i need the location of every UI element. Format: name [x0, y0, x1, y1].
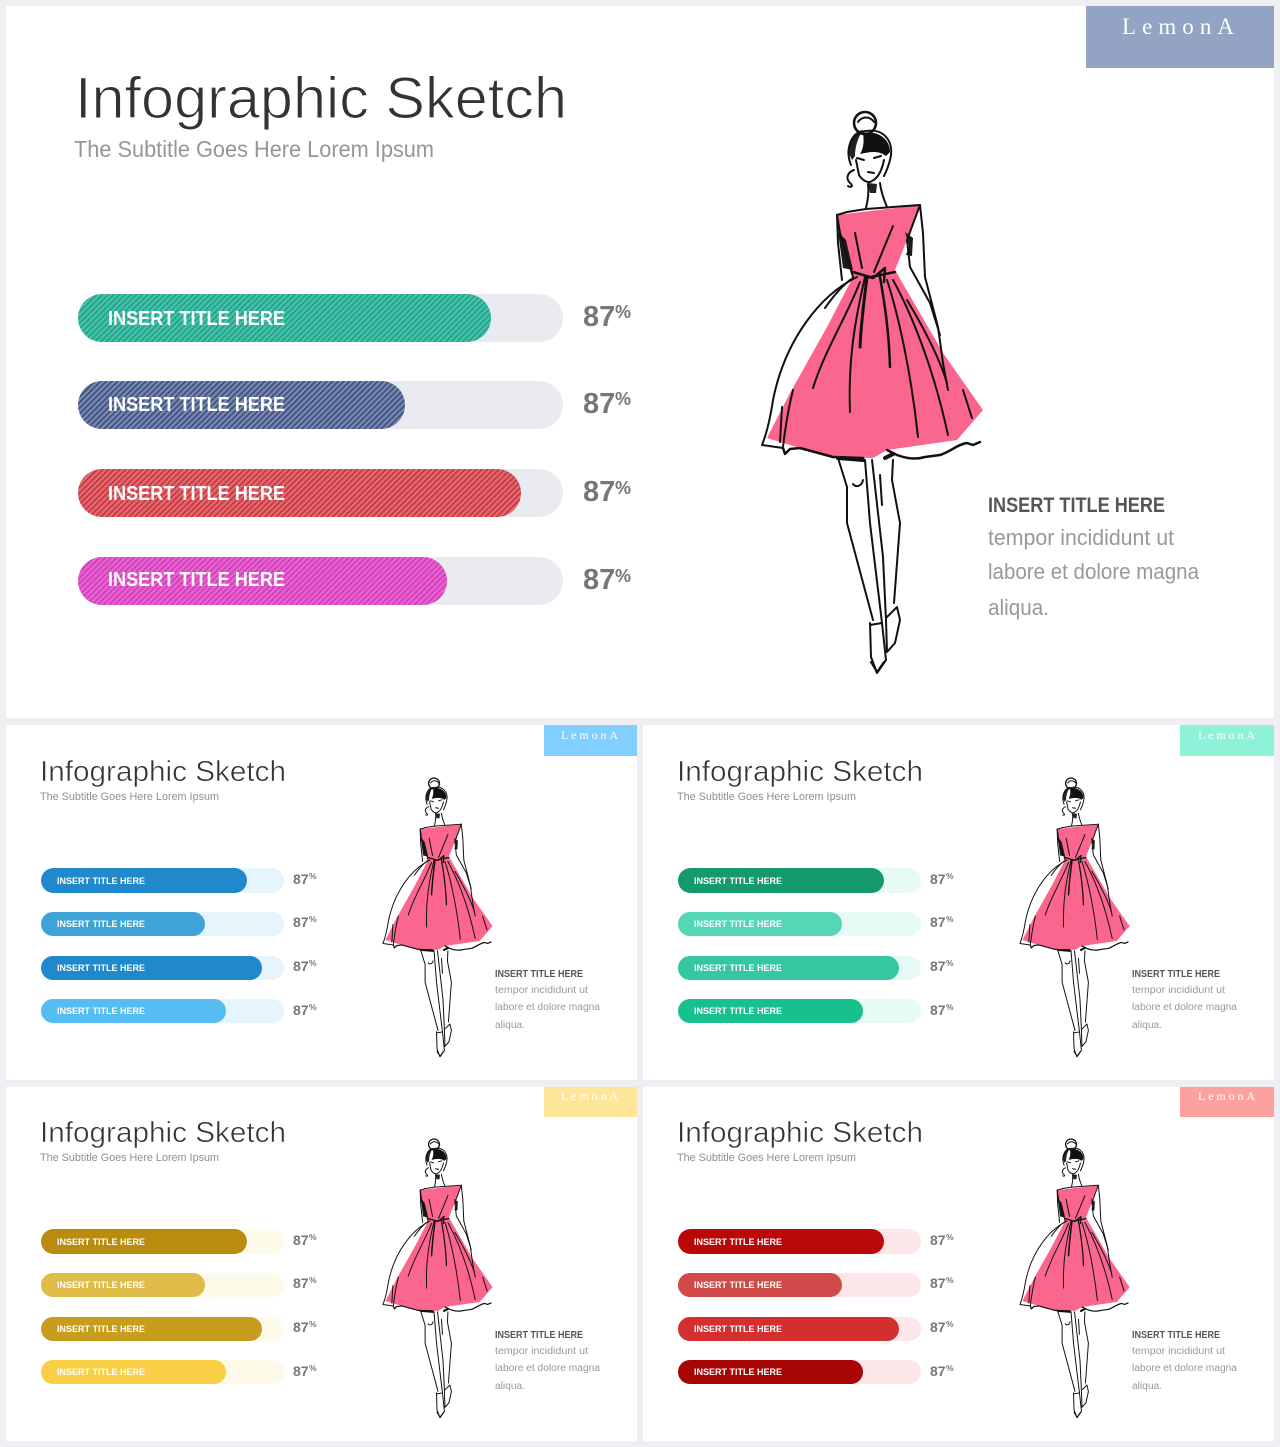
- bar: row 3: 87: [583, 476, 615, 508]
- text block: labore et dolore magna: [495, 1002, 600, 1013]
- text block: [1132, 969, 1237, 1031]
- logo tab: LemonA: [1198, 728, 1255, 742]
- bars: INSERT TITLE HERE: [57, 1324, 145, 1335]
- subtitle: The Subtitle Goes Here Lorem Ipsum: [40, 1152, 219, 1164]
- subtitle: The Subtitle Goes Here Lorem Ipsum: [74, 136, 434, 162]
- text block: INSERT TITLE HERE: [1132, 969, 1220, 980]
- panel: green variant: [643, 725, 1274, 1080]
- bars: 87: [930, 958, 946, 974]
- bar: row 2: [78, 381, 631, 429]
- text block: description: aliqua.: [988, 595, 1049, 620]
- bars: %: [946, 958, 954, 968]
- logo tab: [544, 1087, 637, 1117]
- bars: INSERT TITLE HERE: [694, 1280, 782, 1291]
- bars: INSERT TITLE HERE: [694, 1237, 782, 1248]
- bars: INSERT TITLE HERE: [694, 1367, 782, 1378]
- bars: %: [946, 1275, 954, 1285]
- text block: labore et dolore magna: [495, 1363, 600, 1374]
- text block: tempor incididunt ut: [495, 985, 588, 996]
- logo tab: [544, 725, 637, 756]
- text block: aliqua.: [495, 1020, 525, 1031]
- title: Infographic Sketch: [40, 756, 286, 788]
- bars: 87: [930, 914, 946, 930]
- bar: row 2: INSERT TITLE HERE: [108, 394, 285, 416]
- bars: INSERT TITLE HERE: [57, 919, 145, 930]
- illustration: [1020, 778, 1130, 1057]
- bars: %: [946, 1232, 954, 1242]
- panel: blue variant: [6, 725, 637, 1080]
- illustration: [383, 778, 493, 1057]
- bar: row 2: %: [615, 389, 631, 409]
- logo tab: LemonA: [561, 1089, 618, 1103]
- text block: aliqua.: [1132, 1020, 1162, 1031]
- subtitle: The Subtitle Goes Here Lorem Ipsum: [677, 791, 856, 803]
- bars: [41, 868, 317, 1023]
- bars: INSERT TITLE HERE: [57, 963, 145, 974]
- bars: 87: [930, 871, 946, 887]
- subtitle: The Subtitle Goes Here Lorem Ipsum: [40, 791, 219, 803]
- bars: INSERT TITLE HERE: [57, 876, 145, 887]
- title: Infographic Sketch: [75, 66, 567, 131]
- bars: %: [946, 1363, 954, 1373]
- bars: [41, 1229, 317, 1384]
- text block: tempor incididunt ut: [1132, 985, 1225, 996]
- text block: INSERT TITLE HERE: [1132, 1330, 1220, 1341]
- bars: 87: [293, 1232, 309, 1248]
- bars: %: [309, 1363, 317, 1373]
- text block: description: tempor incididunt ut: [988, 525, 1174, 550]
- bar: row 3: %: [615, 478, 631, 498]
- logo tab: [1086, 6, 1274, 68]
- bars: INSERT TITLE HERE: [57, 1237, 145, 1248]
- text block: [495, 969, 600, 1031]
- bar: row 1: [78, 294, 631, 342]
- bars: INSERT TITLE HERE: [694, 963, 782, 974]
- bar: row 1: INSERT TITLE HERE: [108, 308, 285, 330]
- bar: row 4: INSERT TITLE HERE: [108, 569, 285, 591]
- bars: %: [946, 914, 954, 924]
- bars: 87: [930, 1363, 946, 1379]
- bar: row 3: [78, 469, 631, 517]
- bars: INSERT TITLE HERE: [694, 919, 782, 930]
- bars: 87: [293, 958, 309, 974]
- bars: INSERT TITLE HERE: [57, 1280, 145, 1291]
- text block: tempor incididunt ut: [495, 1346, 588, 1357]
- text block: INSERT TITLE HERE: [495, 969, 583, 980]
- text block: tempor incididunt ut: [1132, 1346, 1225, 1357]
- text block: INSERT TITLE HERE: [495, 1330, 583, 1341]
- text block: aliqua.: [495, 1381, 525, 1392]
- bar: row 2: 87: [583, 388, 615, 420]
- bars: %: [946, 1319, 954, 1329]
- text block: labore et dolore magna: [1132, 1363, 1237, 1374]
- bar: row 4: 87: [583, 564, 615, 596]
- bar: row 1: 87: [583, 301, 615, 333]
- bar: row 3: INSERT TITLE HERE: [108, 483, 285, 505]
- bars: INSERT TITLE HERE: [57, 1006, 145, 1017]
- bars: INSERT TITLE HERE: [694, 1324, 782, 1335]
- illustration: woman in pink dress: [762, 112, 983, 673]
- title: Infographic Sketch: [677, 756, 923, 788]
- logo tab: LemonA: [1198, 1089, 1255, 1103]
- bars: 87: [930, 1319, 946, 1335]
- bars: INSERT TITLE HERE: [57, 1367, 145, 1378]
- text block: description: INSERT TITLE HERE: [988, 494, 1165, 517]
- illustration: [383, 1139, 493, 1418]
- bars: 87: [293, 1275, 309, 1291]
- bars: %: [309, 1002, 317, 1012]
- bars: 87: [930, 1275, 946, 1291]
- bar: row 4: [78, 557, 631, 605]
- bars: %: [309, 1275, 317, 1285]
- bars: INSERT TITLE HERE: [694, 876, 782, 887]
- bar: row 1: %: [615, 302, 631, 322]
- bars: %: [309, 1319, 317, 1329]
- title: Infographic Sketch: [40, 1117, 286, 1149]
- bars: [678, 1229, 954, 1384]
- bars: 87: [293, 1363, 309, 1379]
- bars: %: [946, 871, 954, 881]
- bars: [678, 868, 954, 1023]
- logo tab: LemonA: [1122, 14, 1234, 39]
- logo tab: [1180, 725, 1274, 756]
- bar: row 4: %: [615, 566, 631, 586]
- bars: %: [309, 958, 317, 968]
- title: Infographic Sketch: [677, 1117, 923, 1149]
- logo tab: [1180, 1087, 1274, 1117]
- bars: 87: [930, 1002, 946, 1018]
- bars: 87: [930, 1232, 946, 1248]
- text block: [495, 1330, 600, 1392]
- bars: 87: [293, 914, 309, 930]
- text block: description: labore et dolore magna: [988, 559, 1200, 584]
- panel: main slide: [6, 6, 1274, 718]
- panel: yellow variant: [6, 1087, 637, 1441]
- bars: 87: [293, 1002, 309, 1018]
- text block: [1132, 1330, 1237, 1392]
- bars: 87: [293, 871, 309, 887]
- bars: 87: [293, 1319, 309, 1335]
- bars: %: [309, 1232, 317, 1242]
- subtitle: The Subtitle Goes Here Lorem Ipsum: [677, 1152, 856, 1164]
- bars: %: [309, 871, 317, 881]
- panel: red variant: [643, 1087, 1274, 1441]
- text block: labore et dolore magna: [1132, 1002, 1237, 1013]
- bars: %: [946, 1002, 954, 1012]
- illustration: [1020, 1139, 1130, 1418]
- logo tab: LemonA: [561, 728, 618, 742]
- bars: %: [309, 914, 317, 924]
- bars: INSERT TITLE HERE: [694, 1006, 782, 1017]
- text block: aliqua.: [1132, 1381, 1162, 1392]
- text block: description: [988, 494, 1200, 620]
